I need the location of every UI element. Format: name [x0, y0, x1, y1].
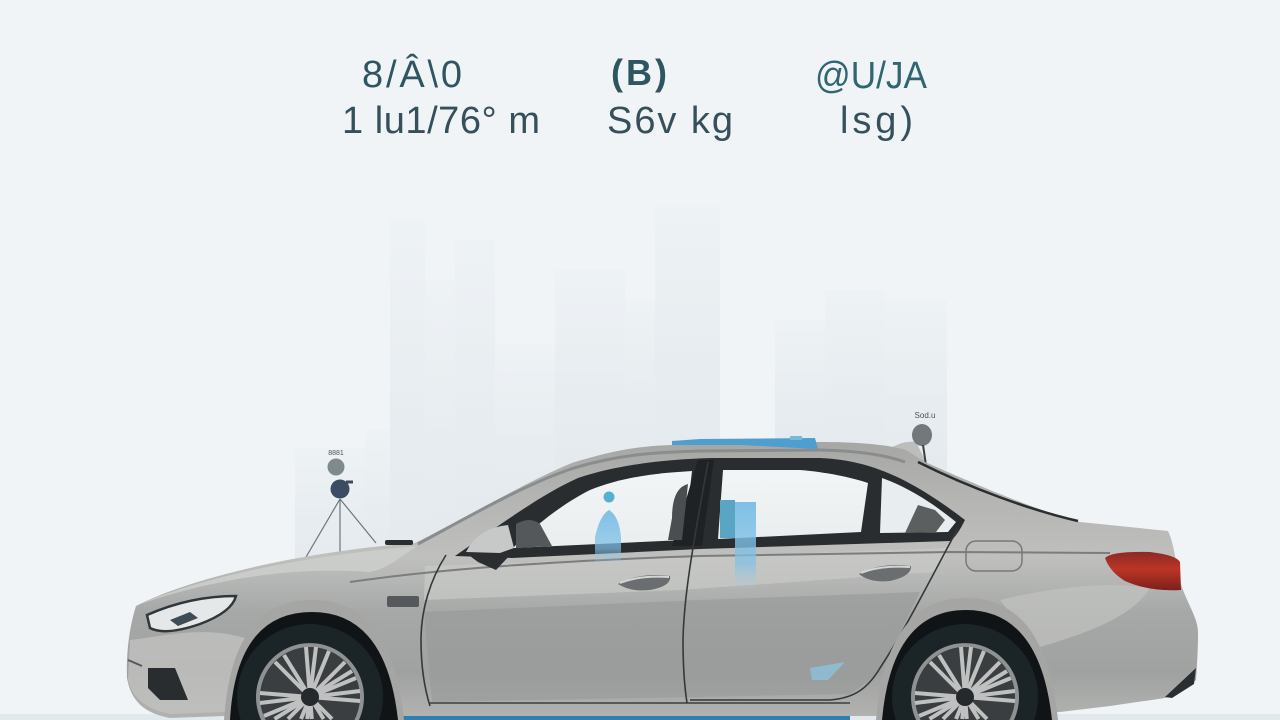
B pillar: [672, 460, 714, 546]
front wheel arch: [224, 600, 404, 720]
faint bar chart backdrop: [295, 205, 947, 567]
rear sensor on roof: Sod.u: [915, 411, 935, 420]
blue door glow: [810, 662, 845, 680]
rear spoiler line: [918, 462, 1078, 521]
spec: third value: lsg): [840, 100, 913, 142]
spec: weight heading: (B): [611, 52, 667, 93]
grille edge: [128, 660, 142, 666]
window frame: [455, 458, 965, 558]
car body: [127, 442, 1198, 718]
blue figure rear: [720, 500, 756, 590]
rear seat silhouette: [668, 484, 688, 540]
spec: weight value: S6v kg: [607, 100, 733, 142]
tail lamp: [1105, 552, 1181, 590]
door panel lower shadow: [424, 592, 920, 702]
wiper: [385, 540, 413, 545]
fuel cap: [966, 541, 1022, 571]
side marker: [387, 596, 419, 607]
rear door handle: [859, 565, 911, 581]
spec: length heading: 8/Â\0: [362, 53, 462, 96]
rear wheel: [892, 624, 1038, 720]
rear sensor on roof: [888, 411, 935, 465]
sill: [430, 702, 850, 704]
chrome roof strip: [418, 450, 905, 544]
front intake: [148, 668, 188, 700]
front sensor with tripod: 8881: [328, 450, 344, 457]
quarter glass interior: [905, 505, 945, 533]
front glass: [513, 471, 692, 548]
ground strip: [0, 714, 1280, 720]
rear wheel arch: [876, 598, 1058, 720]
quarter glass: [880, 478, 956, 533]
rear diffuser: [1165, 668, 1196, 698]
mirror: [466, 525, 514, 570]
character line: [350, 552, 1110, 582]
door cuts: [421, 462, 958, 706]
rear door glass: [718, 470, 868, 539]
blue figure front: [595, 492, 621, 565]
hood highlight: [140, 546, 418, 604]
rear fender highlight: [1000, 585, 1150, 650]
headlight: [147, 596, 236, 631]
front door handle: [618, 575, 670, 590]
front wheel: [237, 624, 383, 720]
front bumper highlight: [128, 632, 250, 714]
car: [127, 436, 1198, 720]
front headrest: [516, 520, 552, 548]
spec: length value: 1 lu1/76° m: [342, 100, 540, 142]
roof blue bar: [672, 436, 818, 449]
door highlight band: [424, 548, 950, 600]
spec: third heading: @U/JA: [815, 55, 928, 97]
front sensor with tripod: [275, 450, 376, 610]
